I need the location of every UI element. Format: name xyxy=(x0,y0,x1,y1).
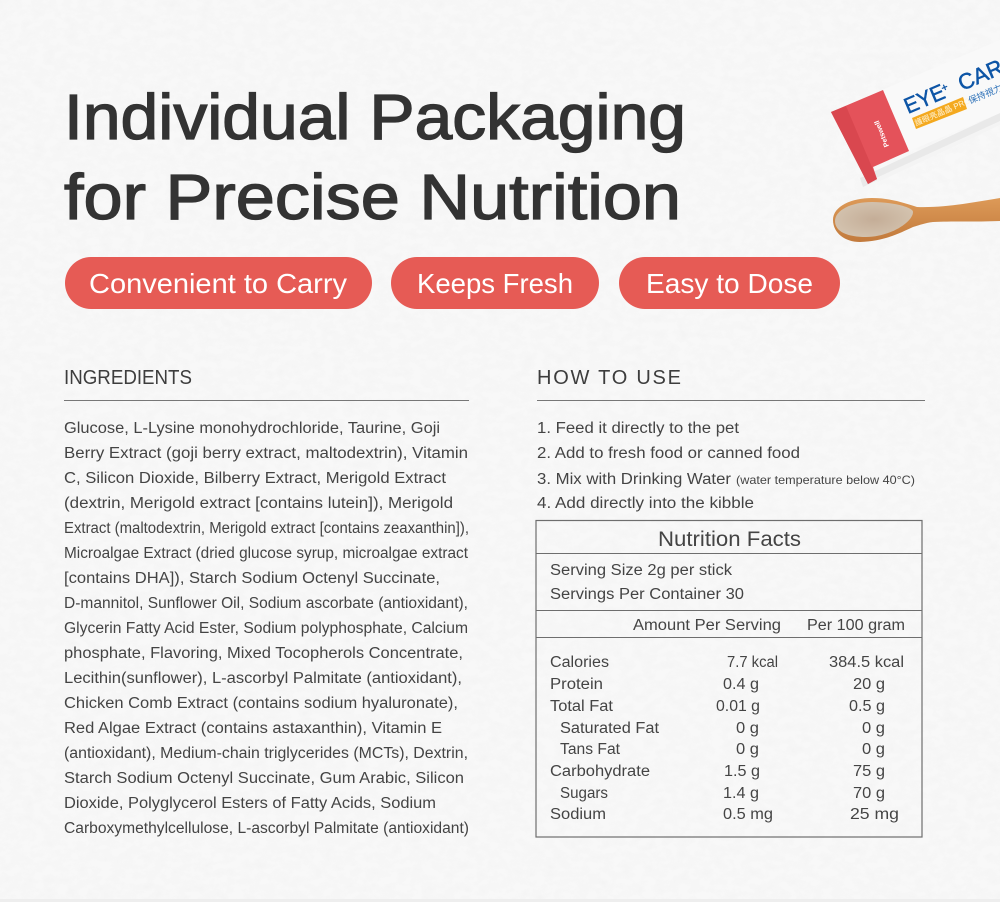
row: carbohydrate: Carbohydrate xyxy=(550,763,650,780)
column headers: Amount Per Serving xyxy=(633,617,781,634)
heading: ingredients: INGREDIENTS xyxy=(64,367,192,389)
title: Individual Packaging xyxy=(64,81,686,153)
tag: Convenient to Carry: Convenient to Carry xyxy=(89,268,347,299)
row: sugars: 70 g xyxy=(853,785,885,802)
ingredients text block: Berry Extract (goji berry extract, maltodextrin), Vitamin xyxy=(64,445,468,462)
serving info: Serving Size 2g per stick xyxy=(550,562,732,579)
table title: Nutrition Facts xyxy=(658,528,801,551)
ingredients text block: (dextrin, Merigold extract [contains lutein]), Merigold xyxy=(64,495,453,512)
ingredients text block: Starch Sodium Octenyl Succinate, Gum Arabic, Silicon xyxy=(64,770,464,787)
row: sodium: Sodium xyxy=(550,806,606,823)
row: sugars xyxy=(560,785,885,802)
product image: stick pack and wooden spoon xyxy=(831,40,1000,242)
row: sodium: 25 mg xyxy=(850,806,899,823)
serving info: Servings Per Container 30 xyxy=(550,586,744,603)
heading: how to use: HOW TO USE xyxy=(537,367,681,389)
tag: Easy to Dose xyxy=(619,257,840,309)
tag: Convenient to Carry xyxy=(65,257,372,309)
row: trans fat: 0 g xyxy=(736,741,759,758)
title xyxy=(64,81,686,233)
usage steps xyxy=(537,420,915,512)
ingredients text block: C, Silicon Dioxide, Bilberry Extract, Merigold Extract xyxy=(64,470,447,487)
column headers xyxy=(633,617,905,634)
row: calories: 384.5 kcal xyxy=(829,654,904,671)
icon: stick pack: Petswell xyxy=(874,119,891,148)
row: protein: 20 g xyxy=(853,676,885,693)
tag: Keeps Fresh xyxy=(391,257,599,309)
row: total fat xyxy=(550,698,885,715)
usage steps: 2. Add to fresh food or canned food xyxy=(537,445,800,462)
row: carbohydrate xyxy=(550,763,885,780)
row: sodium xyxy=(550,806,899,823)
row: saturated fat: 0 g xyxy=(862,720,885,737)
icon: stick pack: 護眼亮晶晶 PRO xyxy=(913,95,972,128)
row: sodium: 0.5 mg xyxy=(723,806,773,823)
ingredients text block: D-mannitol, Sunflower Oil, Sodium ascorbate (antioxidant), xyxy=(64,595,468,612)
serving info xyxy=(550,562,744,603)
row: saturated fat: Saturated Fat xyxy=(560,720,660,737)
row: saturated fat: 0 g xyxy=(736,720,759,737)
row: trans fat: Tans Fat xyxy=(560,741,621,758)
ingredients text block: Lecithin(sunflower), L-ascorbyl Palmitate (antioxidant), xyxy=(64,670,462,687)
row: trans fat xyxy=(560,741,885,758)
row: protein: 0.4 g xyxy=(723,676,759,693)
ingredients text block: Glycerin Fatty Acid Ester, Sodium polyphosphate, Calcium xyxy=(64,620,468,637)
ingredients text block: Extract (maltodextrin, Merigold extract [contains zeaxanthin]), xyxy=(64,520,469,537)
ingredients text block: phosphate, Flavoring, Mixed Tocopherols Concentrate, xyxy=(64,645,463,662)
row: sugars: 1.4 g xyxy=(723,785,759,802)
row: total fat: 0.5 g xyxy=(849,698,885,715)
feature tags xyxy=(65,257,840,309)
row: calories xyxy=(550,654,904,671)
row: total fat: 0.01 g xyxy=(716,698,760,715)
icon: stick pack: EYE xyxy=(900,79,949,119)
ingredients text block: Dioxide, Polyglycerol Esters of Fatty Acids, Sodium xyxy=(64,795,436,812)
ingredients text block: Red Algae Extract (contains astaxanthin), Vitamin E xyxy=(64,720,442,737)
usage steps: 3. Mix with Drinking Water xyxy=(537,471,731,488)
row: calories: 7.7 kcal xyxy=(727,654,778,671)
nutrition facts table xyxy=(536,520,922,837)
ingredients text block: Glucose, L-Lysine monohydrochloride, Taurine, Goji xyxy=(64,420,440,437)
column headers: Per 100 gram xyxy=(807,617,905,634)
row: protein xyxy=(550,676,885,693)
row: carbohydrate: 75 g xyxy=(853,763,885,780)
ingredients text block xyxy=(64,420,469,837)
ingredients text block: Chicken Comb Extract (contains sodium hyaluronate), xyxy=(64,695,458,712)
ingredients text block: Carboxymethylcellulose, L-ascorbyl Palmitate (antioxidant) xyxy=(64,820,469,837)
row: saturated fat xyxy=(560,720,885,737)
title: for Precise Nutrition xyxy=(64,161,681,233)
icon: stick pack: + xyxy=(939,81,950,95)
tag: Keeps Fresh: Keeps Fresh xyxy=(417,268,573,299)
ingredients text block: [contains DHA]), Starch Sodium Octenyl Succinate, xyxy=(64,570,440,587)
row: protein: Protein xyxy=(550,676,603,693)
icon: wooden spoon with powder xyxy=(833,198,1000,242)
icon: stick pack xyxy=(831,40,1000,187)
ingredients text block: Microalgae Extract (dried glucose syrup, microalgae extract xyxy=(64,545,469,562)
tag: Easy to Dose: Easy to Dose xyxy=(646,268,813,299)
panel: how to use xyxy=(537,367,925,512)
row: carbohydrate: 1.5 g xyxy=(724,763,760,780)
panel: ingredients xyxy=(64,367,469,837)
usage steps: 1. Feed it directly to the pet xyxy=(537,420,740,437)
ingredients text block: (antioxidant), Medium-chain triglycerides (MCTs), Dextrin, xyxy=(64,745,468,762)
usage steps: 4. Add directly into the kibble xyxy=(537,495,754,512)
usage steps: (water temperature below 40°C) xyxy=(736,473,915,487)
row: total fat: Total Fat xyxy=(550,698,614,715)
row: sugars: Sugars xyxy=(560,785,608,802)
row: trans fat: 0 g xyxy=(862,741,885,758)
row: calories: Calories xyxy=(550,654,609,671)
